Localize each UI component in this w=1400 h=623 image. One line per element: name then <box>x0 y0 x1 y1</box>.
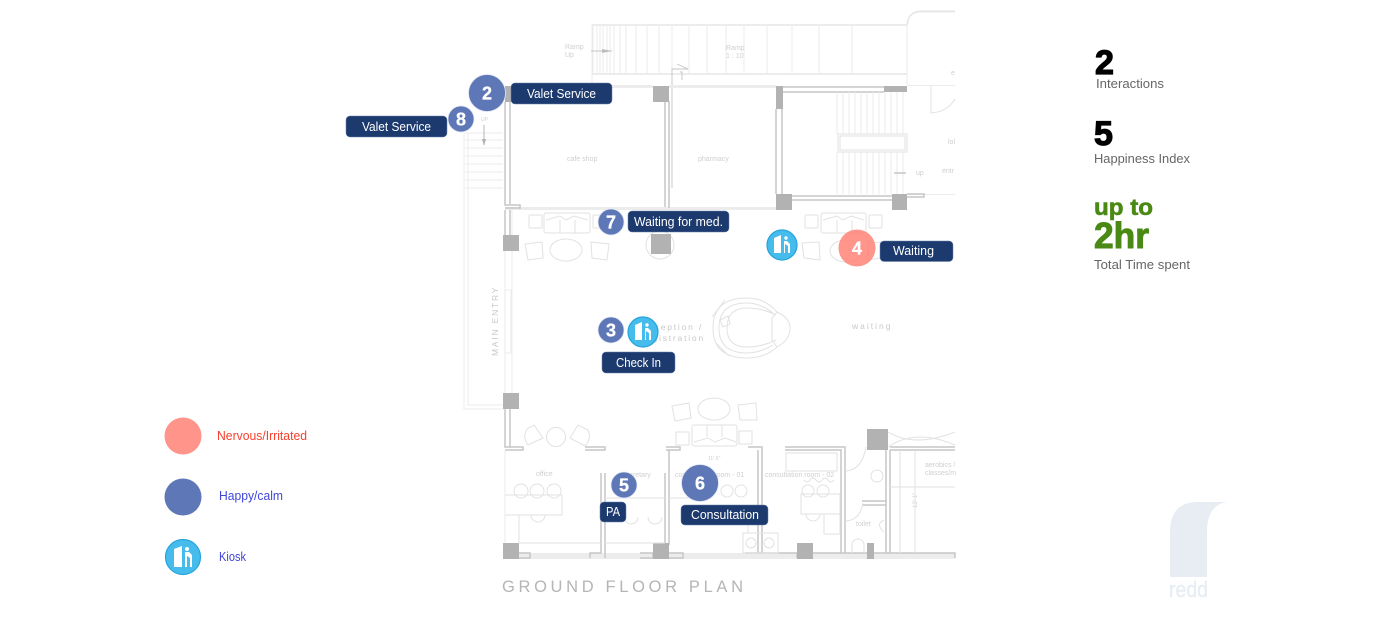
step 7: waiting for medication: Waiting for med. <box>634 214 723 229</box>
step 3: check in: Check In <box>616 355 661 370</box>
step 6: consultation <box>681 464 768 525</box>
left stairs <box>481 117 489 146</box>
legend: kiosk: Kiosk <box>219 549 246 564</box>
stat: total time spent: Total Time spent <box>1094 257 1190 272</box>
stat: total time spent <box>1094 194 1190 272</box>
ramp: Ramp <box>565 44 584 51</box>
step 2: valet service: 2 <box>482 84 492 104</box>
room labels: pharmacy <box>698 156 729 163</box>
step 3: check in <box>598 317 675 373</box>
logo: redd: redd <box>1169 577 1208 602</box>
stat: total time spent: up to <box>1094 194 1153 220</box>
right stairs and lobby <box>837 70 955 194</box>
step 8: valet service <box>346 106 474 137</box>
stat: happiness index: Happiness Index <box>1094 151 1190 166</box>
icon: kiosk at check in <box>628 317 658 347</box>
legend: nervous: Nervous/Irritated <box>217 429 307 443</box>
left stairs: UP <box>481 117 489 123</box>
step 4: waiting <box>838 230 953 266</box>
right stairs and lobby: e <box>951 70 955 77</box>
step 7: waiting for medication: 7 <box>606 212 616 232</box>
structural columns <box>503 86 907 559</box>
legend: happy: Happy/calm <box>219 489 283 503</box>
room labels: 13'-1" <box>913 493 919 508</box>
upper left lounge furniture <box>525 213 674 261</box>
room labels <box>490 156 956 528</box>
icon: kiosk in waiting area <box>767 230 797 260</box>
step 8: valet service: 8 <box>456 110 466 130</box>
stat: interactions: 2 <box>1095 44 1114 82</box>
room labels: secretary <box>622 472 651 479</box>
step 7: waiting for medication <box>598 209 729 235</box>
room labels: consultation room - 01 <box>675 472 744 479</box>
room labels: registration <box>641 333 705 343</box>
upper right lounge furniture <box>802 213 882 262</box>
legend: happy <box>164 478 283 516</box>
step 8: valet service: Valet Service <box>362 119 431 134</box>
room labels: waiting <box>851 321 892 331</box>
legend <box>164 418 307 574</box>
building walls <box>464 85 955 559</box>
ramp: 1 : 10 <box>726 53 744 60</box>
step 4: waiting: Waiting <box>893 243 934 258</box>
office and consultation furniture <box>505 432 955 553</box>
room labels: classes/m <box>925 470 956 477</box>
room labels: consultation room - 02 <box>765 472 834 479</box>
step 6: consultation: 6 <box>695 474 705 494</box>
room labels: reception / <box>644 322 703 332</box>
room labels: cafe shop <box>567 156 597 163</box>
stat: total time spent: 2hr <box>1094 215 1149 256</box>
plan title: GROUND FLOOR PLAN <box>502 578 743 596</box>
step 5: PA <box>600 472 637 522</box>
step 2: valet service <box>468 74 612 112</box>
legend: kiosk <box>166 540 246 574</box>
right stairs and lobby: lol <box>948 139 955 146</box>
step 4: waiting: 4 <box>852 238 862 258</box>
stat: happiness index <box>1094 115 1190 166</box>
stat: interactions <box>1095 44 1165 91</box>
room labels: office <box>536 471 553 478</box>
right stairs and lobby: up <box>916 170 924 177</box>
stat: happiness index: 5 <box>1094 115 1113 153</box>
step 6: consultation: Consultation <box>691 507 759 522</box>
step 2: valet service: Valet Service <box>527 86 596 101</box>
room labels: 11'-5" <box>708 456 721 462</box>
room labels: aerobics / <box>925 462 955 469</box>
right stairs and lobby: entr <box>942 168 955 175</box>
legend: nervous <box>164 418 307 454</box>
room labels: toilet <box>856 521 871 528</box>
floor plan <box>464 11 956 559</box>
ramp: Ramp <box>726 45 745 52</box>
lower left lounge furniture <box>525 425 589 446</box>
logo: redd <box>1169 502 1227 602</box>
stat: interactions: Interactions <box>1096 76 1165 91</box>
ramp: Up <box>565 52 574 59</box>
room labels: MAIN ENTRY <box>490 286 500 356</box>
step 5: PA: 5 <box>619 476 629 496</box>
step 5: PA: PA <box>606 504 620 519</box>
lower centre lounge furniture <box>672 398 757 446</box>
step 3: check in: 3 <box>606 320 616 340</box>
ramp <box>565 11 955 188</box>
reception desk <box>712 298 790 358</box>
